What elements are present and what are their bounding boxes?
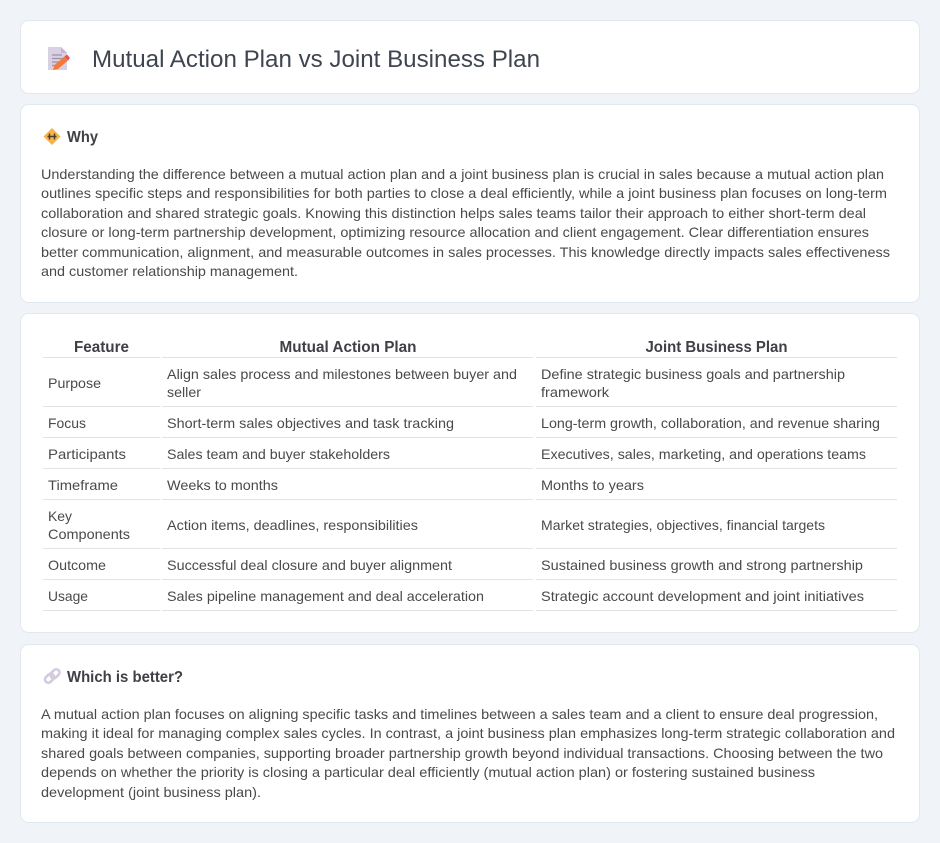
icon: construction diamond (44, 128, 60, 145)
row: outcome: Outcome (48, 557, 106, 573)
text block: which is better (41, 706, 895, 800)
row: purpose: seller (167, 384, 201, 400)
row: timeframe: Timeframe (48, 477, 118, 493)
text block: which is better: making it ideal for managing complex sales cycles. In contrast, a joint business plan emphasizes long-term strategic collaboration and (41, 725, 895, 741)
title: Mutual Action Plan vs Joint Business Plan (92, 46, 540, 73)
row: purpose (48, 366, 845, 400)
heading: why: Why (67, 129, 98, 146)
row: key components: Components (48, 526, 130, 542)
row: usage: Strategic account development and joint initiatives (541, 588, 864, 604)
row: focus: Short-term sales objectives and task tracking (167, 415, 454, 431)
row: participants: Sales team and buyer stakeholders (167, 446, 390, 462)
row: outcome: Successful deal closure and buyer alignment (167, 557, 452, 573)
text block: why: Understanding the difference between a mutual action plan and a joint business plan is crucial in sales because a mutual action plan (41, 166, 884, 182)
panel: which is better (20, 644, 920, 822)
row: outcome (48, 557, 863, 573)
row: usage (48, 588, 864, 604)
row: key components: Key (48, 508, 72, 524)
text block: which is better: shared goals between companies, supporting broader partnership growth beyond individual transactions. Choosing between the two (41, 745, 883, 761)
text block: why: better communication, alignment, and measurable outcomes in sales processes. This knowledge directly impacts sales effectiveness (41, 244, 890, 260)
text block: why (41, 166, 890, 279)
panel: header (20, 20, 920, 94)
text block: which is better: development (joint business plan). (41, 784, 261, 800)
row: key components (48, 508, 825, 542)
table header: Joint Business Plan (646, 339, 788, 356)
row: focus: Focus (48, 415, 86, 431)
panel: comparison table (20, 314, 920, 632)
row: usage: Sales pipeline management and deal acceleration (167, 588, 484, 604)
text block: which is better: A mutual action plan focuses on aligning specific tasks and timelines between a sales team and a client to ensure deal progression, (41, 706, 878, 722)
row: purpose: Align sales process and milestones between buyer and (167, 366, 517, 382)
row: usage: Usage (48, 588, 88, 604)
row: key components: Market strategies, objectives, financial targets (541, 517, 825, 533)
table header: Mutual Action Plan (280, 339, 416, 356)
heading: which is better: Which is better? (67, 669, 183, 686)
text block: why: collaboration and shared strategic goals. Knowing this distinction helps sales teams tailor their approach to either short-term deal (41, 205, 866, 221)
row: timeframe (48, 477, 644, 493)
table header (74, 339, 788, 356)
text block: which is better: depends on whether the priority is closing a particular deal efficiently (mutual action plan) or fostering sustained business (41, 764, 815, 780)
row: participants (48, 446, 866, 462)
row: purpose: Define strategic business goals and partnership (541, 366, 845, 382)
icon: memo and pencil (48, 47, 70, 70)
row: participants: Executives, sales, marketing, and operations teams (541, 446, 866, 462)
row: key components: Action items, deadlines, responsibilities (167, 517, 418, 533)
text block: why: outlines specific steps and responsibilities for both parties to close a deal efficiently, while a joint business plan focuses on long-term (41, 185, 887, 201)
icon: link (44, 668, 61, 684)
row: outcome: Sustained business growth and strong partnership (541, 557, 863, 573)
row: focus (48, 415, 880, 431)
row: timeframe: Weeks to months (167, 477, 278, 493)
text block: why: and customer relationship management. (41, 263, 298, 279)
row: timeframe: Months to years (541, 477, 644, 493)
row: purpose: Purpose (48, 375, 101, 391)
row: purpose: framework (541, 384, 610, 400)
row: focus: Long-term growth, collaboration, and revenue sharing (541, 415, 880, 431)
text block: why: closure or long-term partnership development, optimizing resource allocation and client engagement. Clear differentiation ensures (41, 224, 869, 240)
table header: Feature (74, 339, 129, 356)
panel: why (20, 104, 920, 302)
row: participants: Participants (48, 446, 126, 462)
